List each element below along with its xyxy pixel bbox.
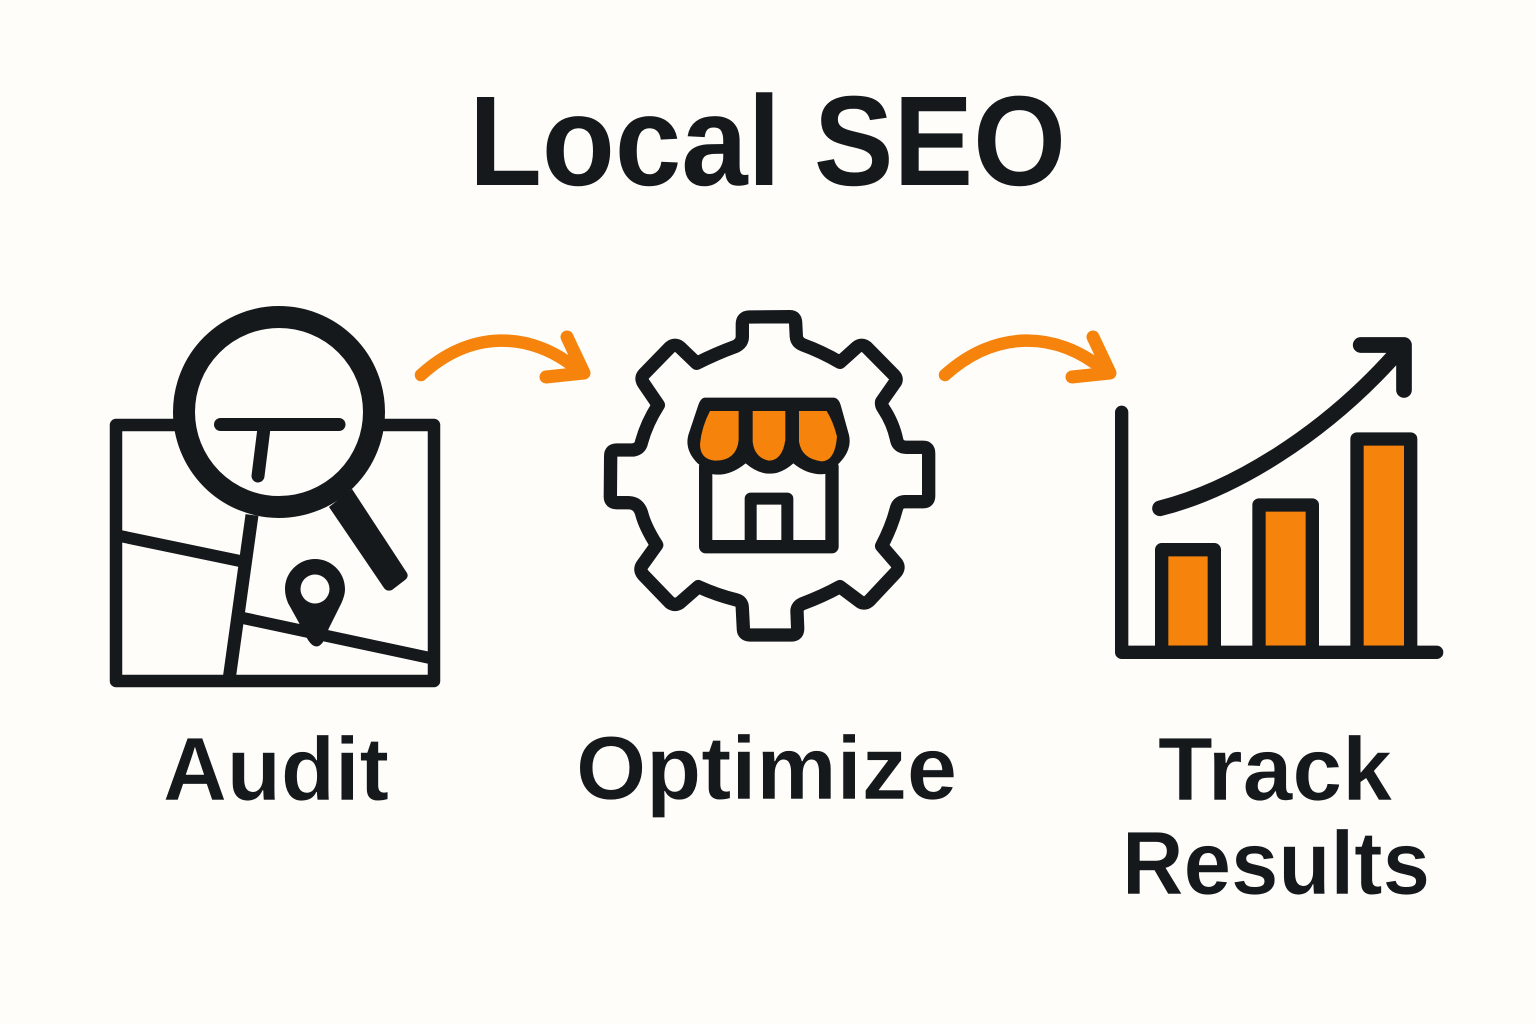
trend arrow <box>1160 345 1404 508</box>
map roads <box>120 515 430 680</box>
magnifier <box>184 317 408 591</box>
label: track results: Results <box>1122 814 1430 914</box>
label: track results: Track <box>1158 720 1393 820</box>
map pin <box>285 559 345 647</box>
label: track results <box>1122 720 1430 914</box>
bar 2 <box>1259 505 1312 652</box>
gear outline <box>610 317 929 635</box>
arrow: optimize to track results <box>945 337 1110 377</box>
store door <box>751 499 787 545</box>
icon: map with magnifier <box>116 317 434 681</box>
bar 1 <box>1162 550 1214 652</box>
title: Local SEO <box>469 70 1066 213</box>
label: audit: Audit <box>163 720 389 820</box>
icon: growth bar chart <box>1122 345 1437 652</box>
label: optimize: Optimize <box>576 719 957 819</box>
store body <box>706 467 832 547</box>
bar 3 <box>1357 439 1411 652</box>
map frame <box>116 425 434 681</box>
chart axes <box>1122 412 1437 652</box>
awning <box>687 398 850 475</box>
arrow: audit to optimize <box>421 337 584 377</box>
icon: gear with storefront <box>610 317 929 635</box>
